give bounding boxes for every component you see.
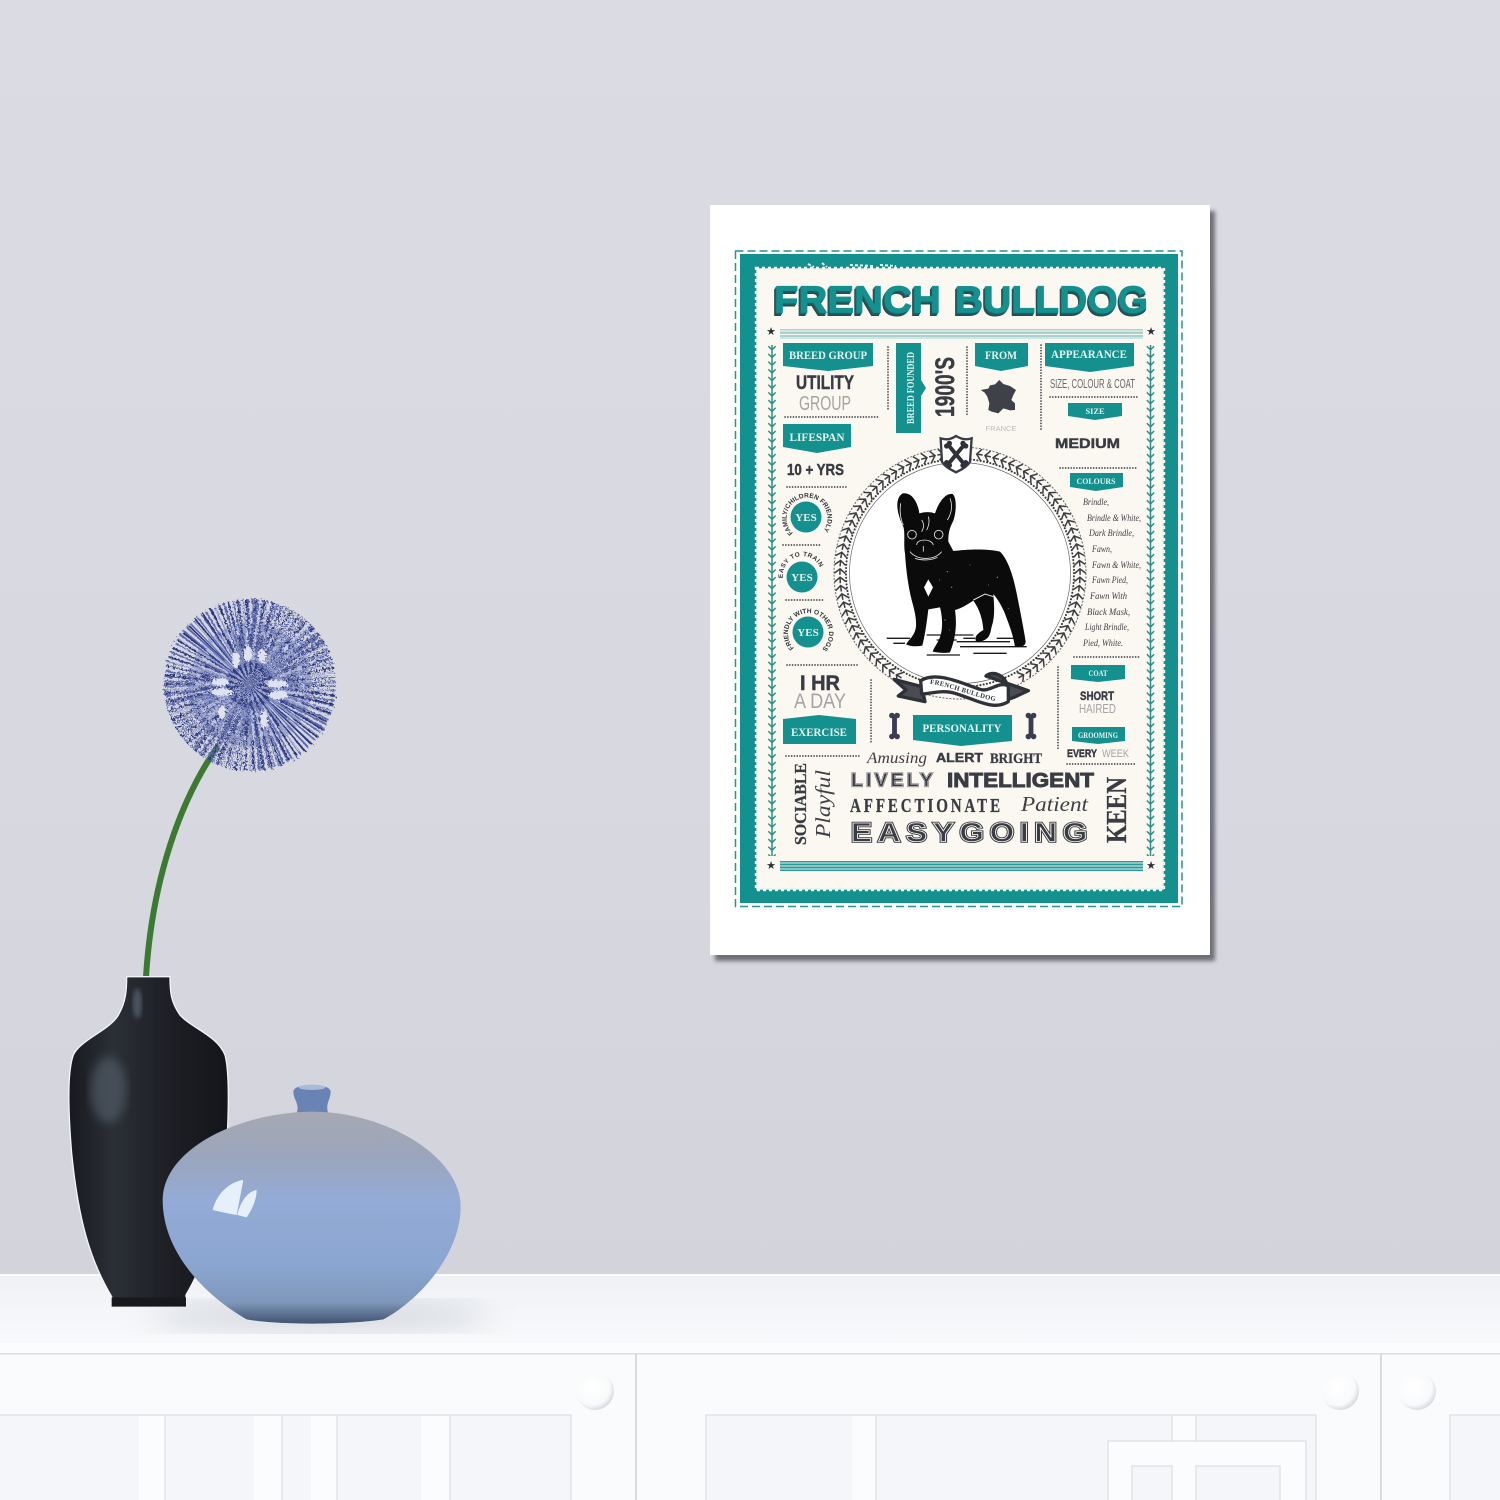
personality word cloud: Amusing xyxy=(866,750,927,767)
breed group banner: BREED GROUP xyxy=(789,350,867,362)
personality word cloud: EASYGOING xyxy=(851,818,1093,848)
stars: ★ xyxy=(1146,325,1156,338)
face lines xyxy=(900,498,993,600)
personality word cloud: EASYGOING xyxy=(851,818,1093,848)
personality word cloud: LIVELY xyxy=(851,770,936,792)
from banner xyxy=(975,343,1028,371)
colours list xyxy=(1082,497,1141,648)
colours list: Light Brindle, xyxy=(1084,622,1129,632)
personality word cloud: ALERT xyxy=(936,750,983,765)
icon: left bone xyxy=(889,713,900,739)
appearance banner: APPEARANCE xyxy=(1051,349,1127,361)
icon: shield with crossed bones xyxy=(941,436,972,472)
breed founded banner: BREED FOUNDED xyxy=(906,352,917,424)
france label: FRANCE xyxy=(986,424,1016,433)
coat banner xyxy=(1071,665,1125,682)
personality word cloud: BRIGHT xyxy=(990,751,1042,767)
blue vase xyxy=(163,1085,461,1324)
top stripes xyxy=(780,329,1143,339)
lifespan banner: LIFESPAN xyxy=(790,432,845,444)
bottom stripes xyxy=(780,861,1143,871)
breed founded banner xyxy=(896,343,926,433)
colours list: Black Mask, xyxy=(1087,607,1130,617)
stars: ★ xyxy=(1146,859,1156,872)
appearance banner xyxy=(1045,343,1134,372)
black vase xyxy=(69,977,228,1307)
fur flecks xyxy=(939,564,1009,630)
coat banner: COAT xyxy=(1088,668,1108,678)
grooming banner xyxy=(1072,727,1125,744)
title: BULLDOG xyxy=(953,282,1147,324)
badge: family children friendly: FAMILY/CHILDREN FRIENDLY xyxy=(782,493,832,536)
colours banner xyxy=(1070,473,1123,491)
poster shadow xyxy=(715,211,1215,961)
title: FRENCH xyxy=(772,282,939,324)
exercise value: A DAY xyxy=(794,690,846,713)
personality word cloud: INTELLIGENT xyxy=(947,770,1094,792)
ribbon: French Bulldog: FRENCH BULLDOG xyxy=(930,680,996,701)
ground shading xyxy=(887,635,1027,655)
stars: ★ xyxy=(766,325,776,338)
badge: easy to train: EASY TO TRAIN xyxy=(778,552,824,578)
lifespan banner xyxy=(783,424,851,453)
grooming value: EVERY xyxy=(1067,748,1098,760)
badge: friendly with other dogs: YES xyxy=(797,627,819,639)
sideboard xyxy=(0,1274,1500,1500)
grooming value: WEEK xyxy=(1102,748,1130,760)
right chevron column xyxy=(1146,345,1155,856)
personality banner xyxy=(913,715,1012,746)
personality word cloud: LIVELY xyxy=(851,770,936,792)
badge: friendly with other dogs: FRIENDLY WITH OTHER DOGS xyxy=(783,608,834,652)
personality word cloud: KEEN xyxy=(1102,777,1133,843)
icon: right bone xyxy=(1026,713,1036,739)
colours list: Brindle & White, xyxy=(1087,513,1141,523)
size banner xyxy=(1068,403,1122,420)
badge: family children friendly: YES xyxy=(795,512,817,524)
stars xyxy=(766,325,1156,872)
colours list: Fawn With xyxy=(1089,591,1127,601)
size banner: SIZE xyxy=(1086,406,1105,416)
breed group banner xyxy=(783,343,873,371)
grooming banner: GROOMING xyxy=(1078,731,1118,740)
icon: bulldog silhouette xyxy=(887,493,1027,655)
personality word cloud: SOCIABLE xyxy=(791,763,810,845)
title: FRENCH xyxy=(774,280,941,322)
flower stem xyxy=(146,746,218,977)
title: BULLDOG xyxy=(954,281,1148,323)
colours list: Fawn, xyxy=(1091,544,1112,554)
badge: easy to train xyxy=(778,552,824,592)
size value: MEDIUM xyxy=(1055,435,1120,451)
exercise banner xyxy=(783,715,856,744)
badge wreath xyxy=(829,447,1091,699)
stars: ★ xyxy=(766,859,776,872)
poster paper xyxy=(710,205,1210,955)
personality word cloud: Patient xyxy=(1020,792,1089,816)
exercise value xyxy=(794,672,846,713)
colours list: Dark Brindle, xyxy=(1088,528,1134,538)
ribbon: French Bulldog xyxy=(892,672,1030,707)
icon: France map xyxy=(981,380,1016,413)
dotted dividers xyxy=(783,345,1139,764)
colours list: Fawn Pied, xyxy=(1091,575,1128,585)
colours banner: COLOURS xyxy=(1076,476,1116,486)
personality word cloud: AFFECTIONATE xyxy=(850,795,1003,817)
exercise banner: EXERCISE xyxy=(791,727,847,739)
chest diamond xyxy=(924,579,933,597)
utility group: GROUP xyxy=(799,393,851,415)
personality word cloud xyxy=(791,750,1133,848)
coat value: HAIRED xyxy=(1079,701,1116,716)
badge: easy to train: YES xyxy=(791,572,813,584)
title xyxy=(772,280,1148,324)
personality banner: PERSONALITY xyxy=(922,723,1002,735)
vase shadow on sideboard xyxy=(150,1301,490,1331)
utility group: UTILITY xyxy=(796,373,854,394)
from banner: FROM xyxy=(985,348,1017,362)
coat value xyxy=(1079,689,1116,716)
flower head xyxy=(184,619,316,751)
lifespan value: 10 + YRS xyxy=(787,462,844,479)
left chevron column xyxy=(768,345,776,856)
coat value: SHORT xyxy=(1080,689,1115,703)
grooming value xyxy=(1067,748,1130,760)
exercise value: I HR xyxy=(800,672,840,695)
founded year: 1900'S xyxy=(930,357,960,417)
colours list: Brindle, xyxy=(1083,497,1109,507)
personality word cloud: Playful xyxy=(811,770,835,839)
colours list: Pied, White. xyxy=(1082,638,1123,648)
title: FRENCH xyxy=(773,281,940,323)
dog body xyxy=(897,493,1026,653)
teal frame xyxy=(740,254,1178,903)
utility group xyxy=(796,373,854,415)
dashed outer border xyxy=(736,251,1182,906)
colours list: Fawn & White, xyxy=(1091,560,1141,570)
appearance subtitle: SIZE, COLOUR & COAT xyxy=(1050,376,1135,391)
title: BULLDOG xyxy=(955,280,1148,322)
cream inner panel xyxy=(756,263,1164,890)
